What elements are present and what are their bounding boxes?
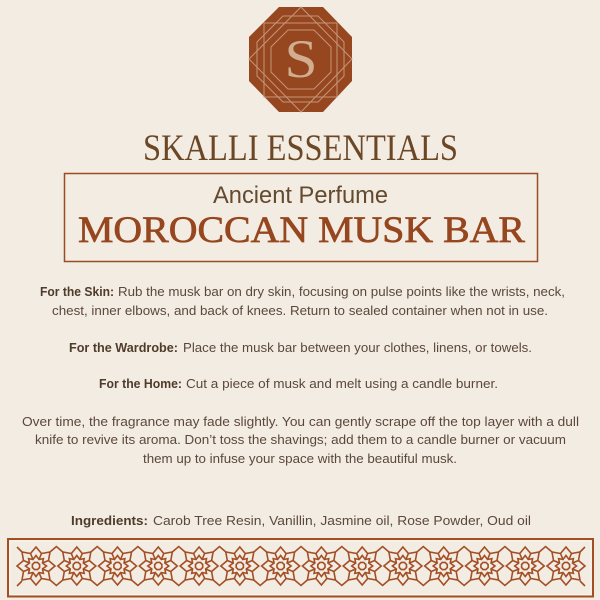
text block: for the skin: Rub the musk bar on dry skin, focusing on pulse points like the wrists, neck, (118, 284, 565, 299)
text block: fragrance note: them up to infuse your space with the beautiful musk. (143, 451, 457, 466)
product name: MOROCCAN MUSK BAR (78, 210, 525, 251)
text block: for the home: For the Home: (99, 376, 182, 391)
text block: for the skin: chest, inner elbows, and back of knees. Return to sealed container when not in use. (52, 303, 548, 318)
decorative border: Moroccan star band (8, 539, 593, 596)
text block: fragrance note (22, 414, 579, 466)
text block: for the skin (40, 284, 565, 318)
text block: for the home: Cut a piece of musk and melt using a candle burner. (186, 376, 498, 391)
logo: octagon emblem with S monogram: S (284, 29, 318, 89)
subtitle: Ancient Perfume (213, 182, 388, 209)
text block: ingredients: Carob Tree Resin, Vanillin, Jasmine oil, Rose Powder, Oud oil (153, 513, 531, 528)
panel: product title box (64, 174, 538, 262)
heading: brand name: SKALLI ESSENTIALS (143, 128, 458, 169)
text block: for the skin: For the Skin: (40, 284, 114, 299)
text block: for the wardrobe: For the Wardrobe: (69, 340, 178, 355)
text block: ingredients: Ingredients: (71, 513, 148, 528)
text block: for the wardrobe: Place the musk bar between your clothes, linens, or towels. (183, 340, 532, 355)
text block: fragrance note: knife to revive its aroma. Don’t toss the shavings; add them to a candle burner or vacuum (35, 432, 566, 447)
text block: fragrance note: Over time, the fragrance may fade slightly. You can gently scrape off the top layer with a dull (22, 414, 579, 429)
logo: octagon emblem with S monogram (249, 7, 352, 112)
